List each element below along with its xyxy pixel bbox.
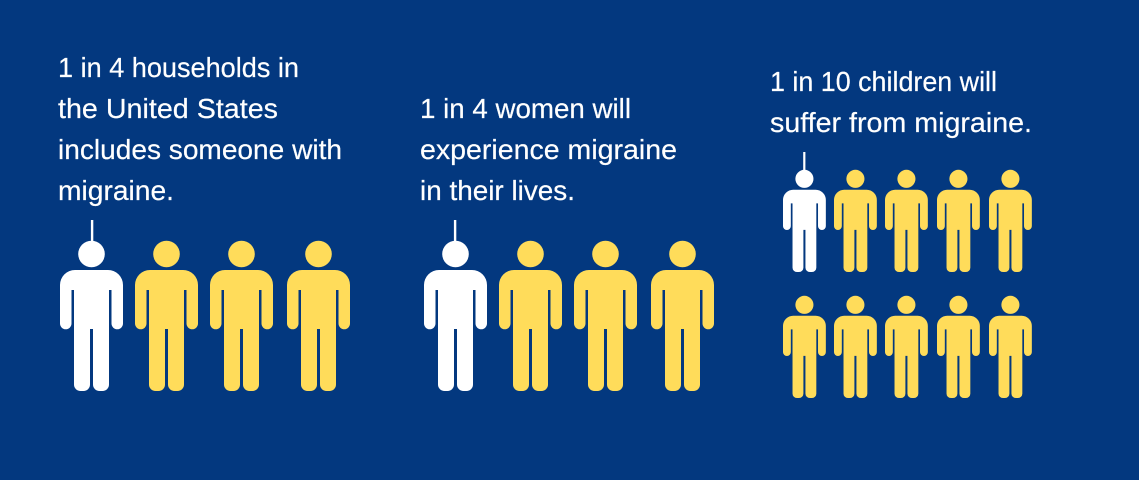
pictogram: 1 of 4 women	[424, 241, 714, 391]
text: households statistic: includes someone with	[58, 134, 342, 165]
text: women statistic	[420, 93, 677, 206]
text: households statistic: 1 in 4 households in	[58, 52, 299, 83]
pictogram: 1 of 10 children	[783, 170, 1032, 398]
text: women statistic: in their lives.	[420, 175, 575, 206]
panel: households	[58, 52, 350, 391]
text: women statistic: 1 in 4 women will	[420, 93, 631, 124]
text: women statistic: experience migraine	[420, 134, 677, 165]
text: households statistic: migraine.	[58, 175, 174, 206]
text: children statistic	[770, 66, 1032, 138]
pointer line	[803, 152, 805, 171]
text: children statistic: 1 in 10 children will	[770, 66, 997, 97]
panel: children	[770, 66, 1032, 398]
text: households statistic	[58, 52, 342, 206]
pointer line	[91, 220, 93, 242]
pointer line	[454, 220, 456, 242]
pictogram: 1 of 4 households	[60, 241, 350, 391]
text: children statistic: suffer from migraine.	[770, 107, 1032, 138]
text: households statistic: the United States	[58, 93, 278, 124]
panel: women	[420, 93, 714, 391]
